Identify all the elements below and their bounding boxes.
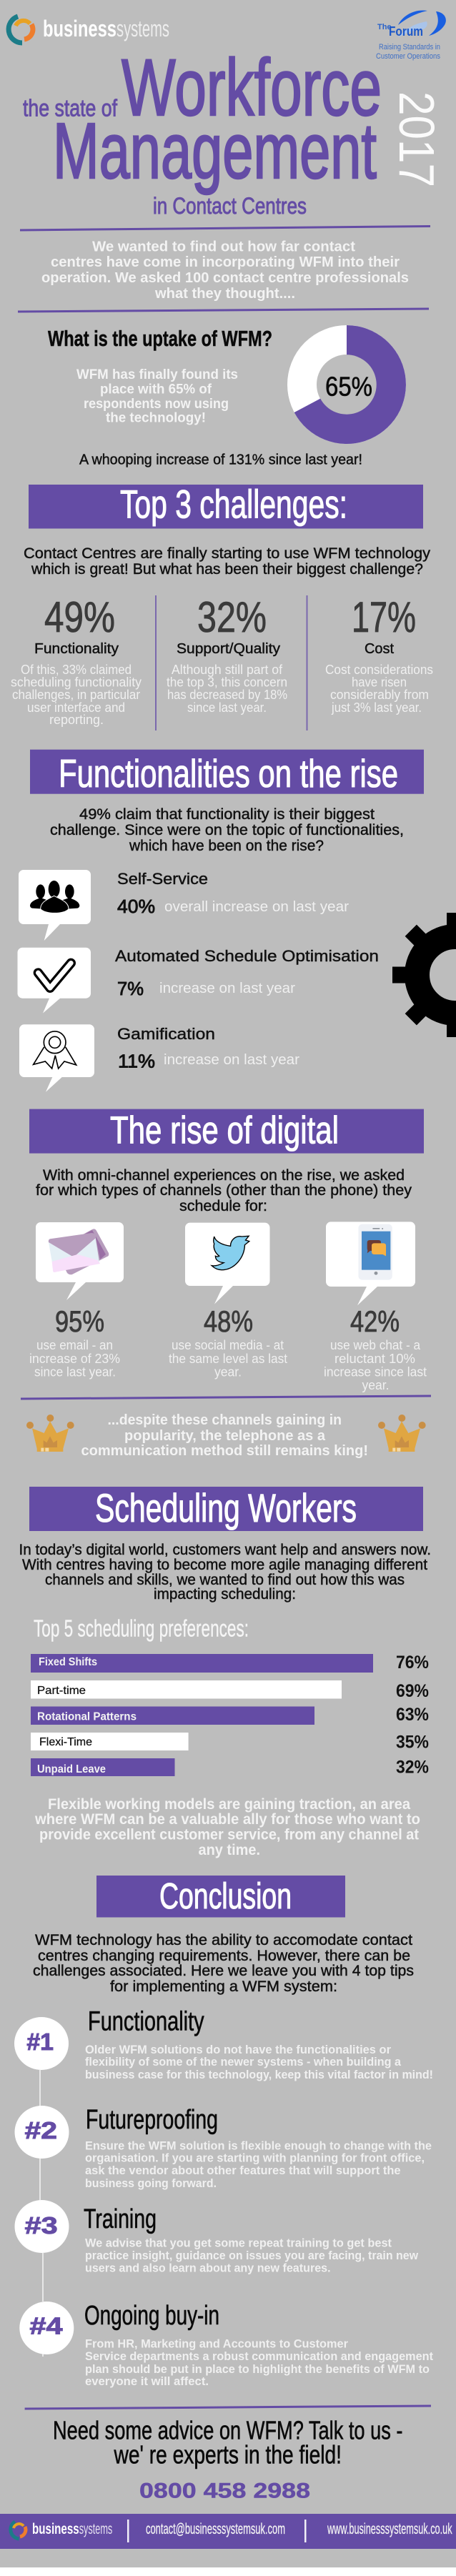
icon: rosette bubble (19, 1024, 94, 1092)
stat: web chat (324, 1304, 427, 1392)
intro text: centres have come in incorporating WFM into their (51, 254, 400, 270)
digital intro: With omni-channel experiences on the rise, we asked (43, 1167, 405, 1184)
conclusion intro: centres changing requirements. However, there can be (38, 1948, 410, 1964)
challenge: cost: Cost considerations (325, 663, 433, 677)
challenge: support/quality: since last year. (187, 700, 267, 715)
functionalities intro (50, 806, 404, 854)
icon: people bubble (19, 870, 91, 941)
uptake text: respondents now using (84, 397, 229, 412)
uptake text: place with 65% of (100, 382, 212, 397)
year 2017: 2017 (389, 91, 445, 187)
flexible working text: Flexible working models are gaining traction, an area (48, 1796, 410, 1813)
flexible working text (34, 1796, 420, 1858)
challenge: functionality: challenges, in particular (12, 688, 140, 702)
flexible working text: where WFM can be a valuable ally for those who want to (34, 1811, 420, 1828)
business systems logo: systems (117, 16, 169, 41)
challenge: support/quality: has decreased by 18% (167, 688, 287, 702)
stat: web chat: year. (362, 1378, 389, 1392)
challenge: functionality: user interface and (27, 700, 125, 715)
item: self-service: 40% (117, 896, 155, 917)
challenge: cost: considerably from (330, 688, 429, 702)
bar chart heading: Top 5 scheduling preferences: (34, 1615, 249, 1641)
call to action: we' re experts in the field! (114, 2440, 342, 2470)
tip 1: functionality: #1 (26, 2028, 54, 2055)
tip 2: futureproofing: Futureproofing (86, 2105, 218, 2135)
stat: email: increase of 23% (29, 1352, 120, 1366)
tip 3: training: We advise that you get some repeat training to get best (85, 2236, 392, 2250)
call to action (53, 2416, 403, 2470)
icon: check bubble (17, 948, 91, 1014)
heading: uptake of WFM: What is the uptake of WFM? (48, 326, 272, 351)
tip 2: futureproofing: organisation. If you are starting with planning for front office, (85, 2151, 425, 2165)
banner: scheduling workers: Scheduling Workers (95, 1485, 357, 1530)
tip 2: futureproofing: business going forward. (85, 2176, 217, 2190)
challenge: functionality: Of this, 33% claimed (21, 663, 132, 677)
item: self-service: Self-Service (117, 870, 208, 888)
gear icon (392, 913, 456, 1037)
item: gamification: 11% (118, 1051, 155, 1072)
challenge: functionality: reporting. (49, 713, 104, 727)
flexible working text: provide excellent customer service, from any channel at (39, 1827, 419, 1843)
item: gamification: Gamification (117, 1025, 215, 1043)
bar chart: scheduling preferences: Part-time (37, 1685, 86, 1697)
bar chart: scheduling preferences: Flexi-Time (39, 1736, 92, 1748)
tip 3: training: users and also learn about any new features. (85, 2262, 331, 2275)
item: automated schedule optimisation: increase on last year (159, 981, 295, 996)
stat: email: since last year. (34, 1365, 116, 1379)
challenge: functionality: 49% (44, 593, 115, 641)
tip 4: ongoing buy-in: Service departments a robust communication and engagement (85, 2349, 433, 2363)
tip 4: ongoing buy-in: From HR, Marketing and Accounts to Customer (85, 2337, 348, 2350)
challenges intro: Contact Centres are finally starting to use WFM technology (24, 545, 431, 562)
banner: conclusion: Conclusion (159, 1876, 292, 1916)
functionalities intro: challenge. Since were on the topic of functionalities, (50, 822, 404, 838)
challenge: support/quality (167, 593, 287, 715)
item: automated schedule optimisation (115, 947, 379, 999)
stat: email: use email - an (36, 1338, 113, 1352)
digital intro: for which types of channels (other than the phone) they (36, 1182, 412, 1199)
bar chart: scheduling preferences: Rotational Patterns (37, 1711, 137, 1723)
tip 3: training: Training (84, 2204, 157, 2234)
stat: web chat: increase since last (324, 1365, 427, 1379)
tip 3: training: #3 (25, 2212, 58, 2239)
icon: crown right (378, 1415, 426, 1452)
tip 2: futureproofing (14, 2105, 432, 2190)
item: self-service: overall increase on last year (164, 899, 349, 915)
bar chart: scheduling preferences: Fixed Shifts (39, 1656, 97, 1668)
stat: email: 95% (55, 1304, 104, 1338)
challenge: cost: just 3% last year. (331, 700, 422, 715)
king text: communication method still remains king! (81, 1443, 368, 1459)
flexible working text: any time. (199, 1842, 260, 1858)
challenge: support/quality: the top 3, this concern (167, 675, 287, 689)
intro text: operation. We asked 100 contact centre professionals (41, 270, 409, 286)
challenge: support/quality: Support/Quality (177, 641, 280, 657)
uptake text: the technology! (106, 410, 206, 426)
intro text (41, 239, 409, 302)
tip 1: functionality: business case for this technology, keep this vital factor in mind! (85, 2068, 433, 2081)
tip 1: functionality: flexibility of some of the newer systems - when building a (85, 2055, 402, 2069)
title: in Contact Centres (153, 193, 307, 219)
icon: web chat bubble (326, 1222, 415, 1305)
banner: the rise of digital: The rise of digital (110, 1109, 339, 1152)
scheduling intro: channels and skills, we wanted to find out how this was (45, 1572, 405, 1588)
The Forum logo: Raising Standards in (379, 43, 440, 51)
challenge: functionality (11, 593, 142, 727)
intro text: what they thought.... (154, 286, 295, 302)
challenge: support/quality: Although still part of (172, 663, 283, 677)
conclusion intro: challenges associated. Here we leave you with 4 top tips (33, 1963, 414, 1979)
icon: crown left (26, 1415, 74, 1452)
tip 4: ongoing buy-in: #4 (30, 2313, 63, 2339)
challenge: cost (325, 593, 433, 715)
stat: social media: the same level as last (169, 1352, 287, 1366)
digital intro (36, 1167, 412, 1214)
challenge: functionality: scheduling functionality (11, 675, 142, 689)
footer logo (11, 2521, 112, 2539)
stat: social media: use social media - at (172, 1338, 284, 1352)
uptake callout: A whooping increase of 131% since last year! (79, 452, 362, 467)
stat: social media (169, 1304, 287, 1379)
functionalities intro: which have been on the rise? (129, 838, 324, 854)
challenge: cost: 17% (352, 593, 416, 641)
challenges intro: which is great! But what has been their biggest challenge? (31, 561, 423, 578)
stat: web chat: use web chat - a (330, 1338, 421, 1352)
scheduling intro: With centres having to become more agile managing different (22, 1557, 427, 1573)
functionalities intro: 49% claim that functionality is their biggest (79, 806, 375, 823)
item: self-service (117, 870, 349, 917)
title: the state of (23, 94, 118, 122)
conclusion intro (33, 1932, 414, 1995)
conclusion intro: for implementing a WFM system: (110, 1978, 337, 1995)
phone number: 0800 458 2988 (139, 2479, 310, 2502)
stat: web chat: reluctant 10% (334, 1352, 415, 1366)
tip 1: functionality: Older WFM solutions do not have the functionalities or (85, 2043, 391, 2056)
footer logo: business (32, 2521, 79, 2537)
scheduling intro: impacting scheduling: (154, 1586, 296, 1602)
bar chart: scheduling preferences: 32% (396, 1757, 429, 1777)
footer logo: systems (79, 2521, 112, 2537)
uptake text (76, 367, 238, 426)
bar chart: scheduling preferences: 35% (396, 1733, 429, 1753)
tip 1: functionality (14, 2007, 433, 2081)
scheduling intro: In today’s digital world, customers want help and answers now. (19, 1542, 431, 1558)
tip 4: ongoing buy-in: Ongoing buy-in (84, 2301, 219, 2331)
stat: social media: year. (214, 1365, 242, 1379)
tip 4: ongoing buy-in (19, 2301, 433, 2388)
The Forum logo: Customer Operations (376, 52, 440, 61)
stat: web chat: 42% (350, 1304, 400, 1338)
digital intro: schedule for: (179, 1198, 267, 1214)
king text (81, 1412, 368, 1459)
conclusion intro: WFM technology has the ability to accomodate contact (35, 1932, 412, 1948)
business systems logo: business (43, 16, 117, 41)
king text: popularity, the telephone as a (124, 1428, 326, 1444)
bar chart: scheduling preferences: Unpaid Leave (37, 1763, 106, 1775)
scheduling intro (19, 1542, 431, 1602)
tip 2: futureproofing: ask the vendor about other features that will support the (85, 2164, 401, 2177)
The Forum logo (376, 10, 446, 61)
item: automated schedule optimisation: Automated Schedule Optimisation (115, 947, 379, 965)
donut chart 65% (294, 325, 406, 444)
challenges intro (24, 545, 431, 578)
challenge: cost: Cost (365, 641, 394, 657)
icon: email bubble (36, 1222, 124, 1300)
tip 3: training: practice insight, guidance on issues you are facing, train new (85, 2249, 419, 2262)
stat: email (29, 1304, 120, 1379)
footer band (0, 2514, 456, 2549)
item: gamification: increase on last year (164, 1052, 299, 1068)
icon: twitter bubble (185, 1223, 270, 1304)
tip 2: futureproofing: #2 (25, 2117, 57, 2144)
tip 3: training (14, 2200, 419, 2275)
title (23, 43, 382, 219)
bar chart: scheduling preferences: 63% (396, 1705, 429, 1725)
bar chart: scheduling preferences: 76% (396, 1653, 429, 1673)
tip 4: ongoing buy-in: everyone it will affect. (85, 2374, 209, 2388)
intro text: We wanted to find out how far contact (92, 239, 355, 254)
stat: social media: 48% (204, 1304, 253, 1338)
donut chart 65%: 65% (325, 372, 372, 402)
The Forum logo: The (377, 23, 392, 31)
king text: ...despite these channels gaining in (107, 1412, 342, 1428)
bar chart: scheduling preferences: 69% (396, 1681, 429, 1701)
banner: top 3 challenges: Top 3 challenges: (120, 482, 347, 526)
uptake text: WFM has finally found its (76, 367, 238, 382)
tip 4: ongoing buy-in: plan should be put in place to highlight the benefits of WFM to (85, 2362, 430, 2376)
footer email: contact@businesssystemsuk.com (146, 2521, 285, 2537)
tip 1: functionality: Functionality (88, 2007, 204, 2037)
The Forum logo: Forum (389, 24, 423, 39)
tip 2: futureproofing: Ensure the WFM solution is flexible enough to change with the (85, 2139, 432, 2153)
challenge: support/quality: 32% (197, 593, 267, 641)
item: gamification (117, 1025, 299, 1072)
business systems logo (9, 16, 169, 43)
item: automated schedule optimisation: 7% (117, 978, 144, 999)
challenge: cost: have risen (352, 675, 407, 689)
bar chart: scheduling preferences (31, 1653, 429, 1777)
challenge: functionality: Functionality (34, 641, 119, 657)
